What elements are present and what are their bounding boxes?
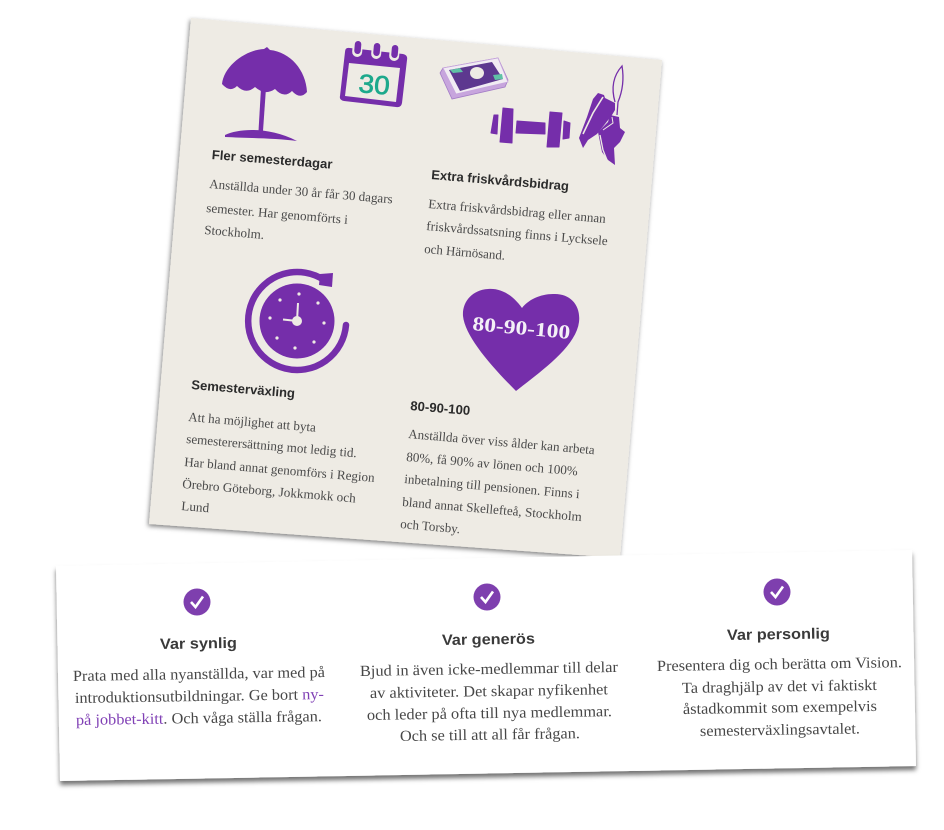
text: Var personlig body: Presentera dig och berätta om Vision. bbox=[657, 654, 902, 675]
icon: dumbbell bbox=[491, 108, 570, 147]
text: Var generös body: Bjud in även icke-medlemmar till delar bbox=[360, 659, 619, 680]
text: Var generös body: Och se till att all får frågan. bbox=[400, 725, 580, 745]
text: 80-90-100 body bbox=[400, 426, 596, 536]
text: 80-90-100 body: och Torsby. bbox=[400, 516, 461, 536]
panel background bbox=[56, 550, 916, 781]
text: Var synlig body bbox=[73, 664, 325, 729]
text: Semesterväxling body: Har bland annat genomförs i Region bbox=[184, 454, 376, 485]
icon: purple heart with 80-90-100 bbox=[463, 289, 579, 391]
panel: beige benefits card bbox=[149, 18, 662, 558]
text: Var generös body: av aktiviteter. Det skapar nyfikenhet bbox=[370, 681, 609, 702]
icon: clock with circular arrow bbox=[248, 272, 346, 370]
column: Var personlig bbox=[657, 578, 902, 740]
text: Semesterväxling body: Att ha möjlighet att byta bbox=[188, 409, 317, 435]
text: Var personlig body: Ta draghjälp av det vi faktiskt bbox=[682, 677, 878, 697]
text: Semesterväxling body: Lund bbox=[181, 498, 210, 515]
text: Semesterväxling body: semesterersättning mot ledig tid. bbox=[186, 431, 357, 460]
text: Var synlig body: introduktionsutbildningar. Ge bort ny- bbox=[75, 686, 324, 707]
heading: Var personlig: Var personlig bbox=[727, 625, 830, 644]
text: Semesterväxling body: Örebro Göteborg, Jokkmokk och bbox=[182, 476, 357, 506]
text: 80-90-100 body: Anställda över viss ålder kan arbeta bbox=[408, 426, 596, 457]
text: Var synlig body: på jobbet-kitt . Och våga ställa frågan. bbox=[76, 708, 322, 729]
icon: check mark bbox=[764, 578, 790, 606]
text: Fler semesterdagar body bbox=[204, 176, 393, 242]
icon: calendar 30 bbox=[340, 40, 407, 107]
icon: running shoes bbox=[579, 66, 625, 165]
text: Var generös body bbox=[360, 659, 619, 745]
column: Var generös bbox=[360, 584, 619, 745]
heart label: 80-90-100 bbox=[472, 313, 571, 344]
heading: Fler semesterdagar: Fler semesterdagar bbox=[211, 147, 333, 172]
icon: beach umbrella bbox=[222, 47, 307, 141]
icon: check mark bbox=[184, 588, 210, 616]
text: Extra friskvårdsbidrag body bbox=[424, 196, 609, 263]
text: Fler semesterdagar body: Stockholm. bbox=[204, 222, 265, 242]
text: Semesterväxling body bbox=[181, 409, 376, 515]
text: Var personlig body bbox=[657, 654, 902, 740]
icon: stack of money bbox=[440, 58, 508, 99]
text: Var generös body: och leder på ofta till nya medlemmar. bbox=[367, 703, 612, 724]
text: Fler semesterdagar body: semester. Har genomförts i bbox=[206, 200, 349, 227]
text: 80-90-100 body: 80%, få 90% av lönen och 100% bbox=[406, 449, 579, 478]
text: 80-90-100 body: inbetalning till pensionen. Finns i bbox=[404, 471, 581, 501]
panel background bbox=[149, 18, 662, 558]
text: Extra friskvårdsbidrag body: Extra friskvårdsbidrag eller annan bbox=[428, 196, 607, 226]
text: Var synlig body: Prata med alla nyanställda, var med på bbox=[73, 664, 325, 685]
icon: check mark bbox=[474, 584, 500, 610]
text: Fler semesterdagar body: Anställda under 30 år får 30 dagars bbox=[209, 176, 393, 206]
heading: Extra friskvårdsbidrag: Extra friskvårdsbidrag bbox=[431, 167, 570, 194]
text: Extra friskvårdsbidrag body: och Härnösand. bbox=[424, 241, 506, 263]
heading: Semesterväxling: Semesterväxling bbox=[191, 377, 296, 401]
text: 80-90-100 body: bland annat Skellefteå, Stockholm bbox=[402, 494, 582, 524]
heading: Var generös: Var generös bbox=[442, 631, 535, 649]
calendar number: 30 bbox=[357, 68, 391, 101]
heading: 80-90-100: 80-90-100 bbox=[410, 398, 471, 418]
text: Extra friskvårdsbidrag body: friskvårdssatsning finns i Lycksele bbox=[426, 218, 609, 248]
text: Var personlig body: åstadkommit som exempelvis bbox=[683, 698, 877, 718]
panel: white tips card bbox=[56, 550, 916, 781]
column: Var synlig bbox=[73, 588, 325, 729]
heading: Var synlig: Var synlig bbox=[160, 635, 237, 653]
text: Var personlig body: semesterväxlingsavtalet. bbox=[700, 720, 860, 740]
